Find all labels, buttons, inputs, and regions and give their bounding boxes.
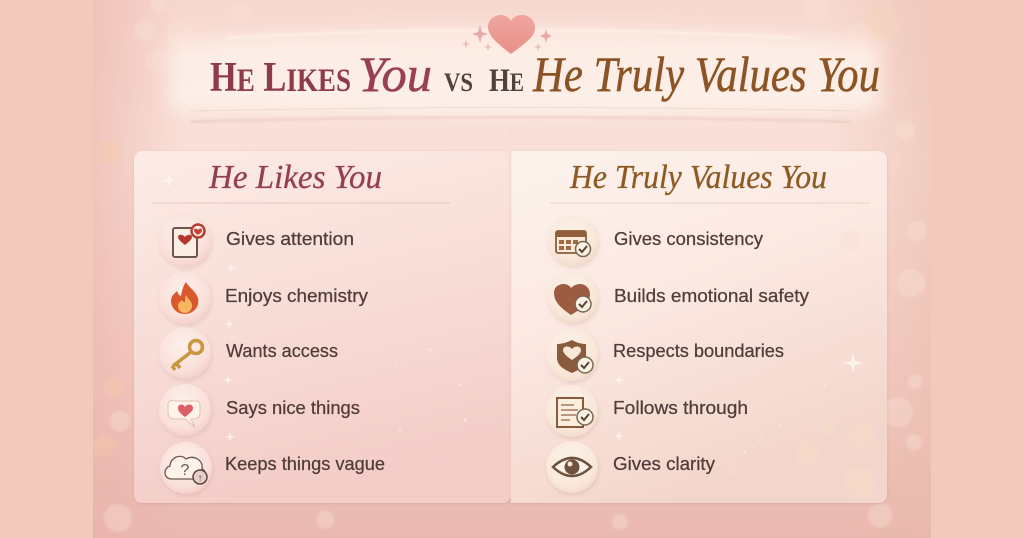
icon: tablet with heart: [159, 215, 211, 267]
text: Enjoys chemistry: Enjoys chemistry: [225, 286, 368, 306]
title banner: [170, 28, 880, 122]
text: Wants access: Wants access: [226, 341, 338, 361]
icon: calendar with check: [548, 216, 598, 266]
title: VS: [444, 68, 473, 97]
icon: key: [159, 327, 211, 379]
icon: eye: [546, 441, 598, 493]
sparkles: [162, 174, 863, 442]
text: Gives clarity: Gives clarity: [613, 454, 715, 474]
heading: He Likes You: He Likes You: [208, 159, 382, 196]
text: Follows through: Follows through: [613, 398, 748, 418]
panel: He Likes You column: [152, 159, 450, 494]
text: Says nice things: Says nice things: [226, 398, 360, 418]
title: [210, 46, 880, 102]
icon: cloud with question mark: [160, 442, 212, 494]
icon: heart with sparkles: [462, 15, 552, 54]
icon: cloud with question mark: ↑: [198, 473, 202, 484]
text: Builds emotional safety: Builds emotional safety: [614, 286, 809, 306]
title: HE: [489, 63, 524, 99]
icon: speech bubble with heart: [159, 384, 211, 436]
title: HE LIKES: [210, 55, 351, 101]
text: Gives consistency: Gives consistency: [614, 229, 763, 249]
icon: flame: [159, 272, 211, 324]
text: Keeps things vague: Keeps things vague: [225, 454, 385, 474]
text: Respects boundaries: Respects boundaries: [613, 341, 784, 361]
text: Gives attention: Gives attention: [226, 229, 354, 249]
icon: cloud with question mark: ?: [181, 462, 190, 479]
panel: He Truly Values You column: [546, 159, 870, 493]
heading: He Truly Values You: He Truly Values You: [569, 159, 827, 196]
title: You: [358, 46, 432, 102]
panel: comparison card: [134, 125, 887, 503]
icon: document with check: [546, 385, 598, 437]
title: He Truly Values You: [532, 46, 880, 102]
icon: heart with check: [548, 273, 598, 323]
icon: shield with check: [546, 329, 598, 381]
